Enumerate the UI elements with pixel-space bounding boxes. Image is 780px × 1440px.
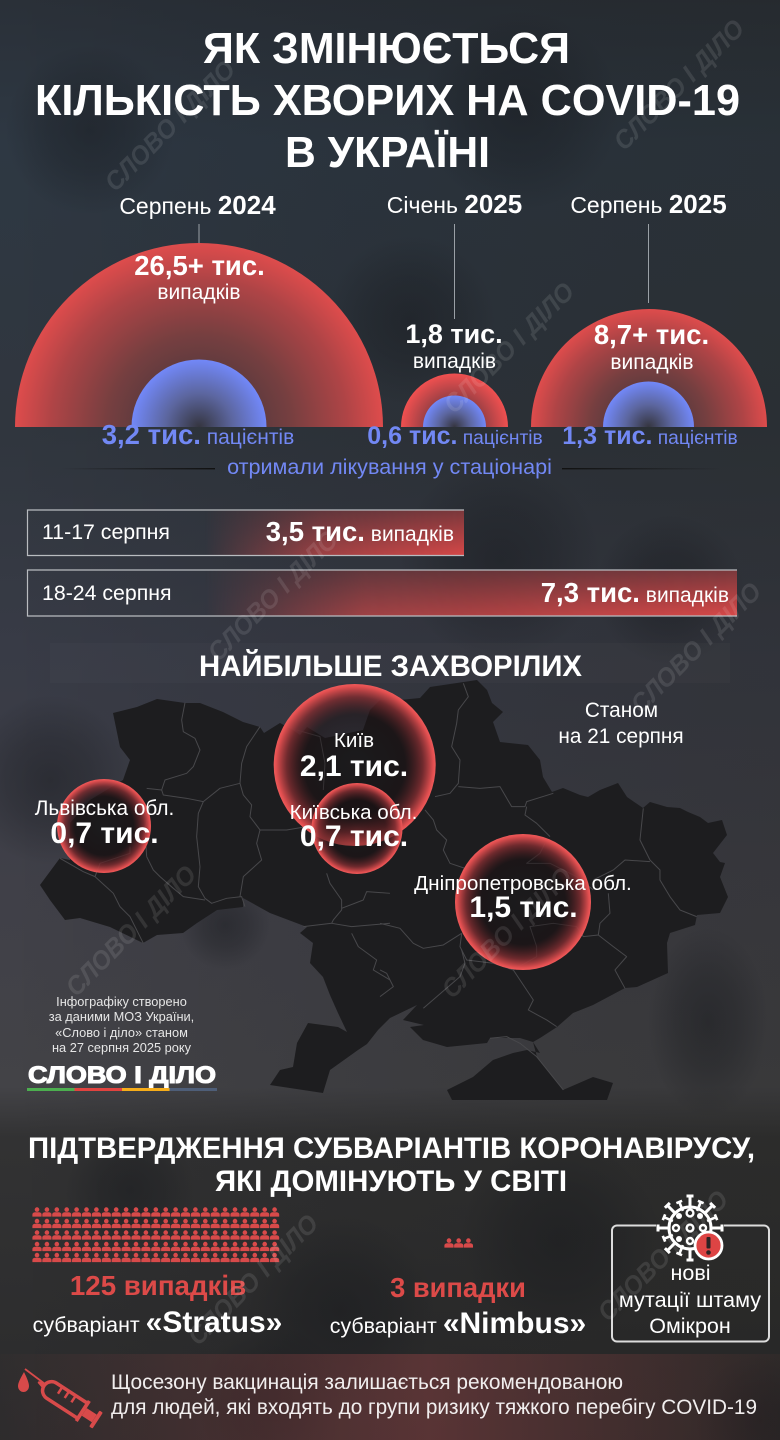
credit text: Інфографіку створено [56, 994, 187, 1009]
credit text [49, 994, 194, 1055]
heading: subvariants: ПІДТВЕРДЖЕННЯ СУБВАРІАНТІВ КОРОНАВІРУСУ, [28, 1132, 755, 1165]
semicircle: August 2025 [531, 309, 767, 427]
heading: subvariants: ЯКІ ДОМІНУЮТЬ У СВІТІ [215, 1165, 567, 1198]
bubble: Lviv region: 0,7 тис. [50, 817, 159, 850]
pictogram: 125 people [32, 1207, 279, 1262]
stat: Stratus [33, 1270, 282, 1339]
chart: semicircles of cases [15, 194, 767, 478]
bubble: Dnipropetrovsk region: Дніпропетровська обл. [414, 872, 632, 895]
note: as of 21 August: Станом [585, 699, 658, 722]
title: КІЛЬКІСТЬ ХВОРИХ НА COVID-19 [35, 76, 740, 125]
label: August 2024: Серпень 2024 [119, 190, 276, 220]
watermarks: СЛОВО І ДІЛО [59, 859, 202, 1002]
panel: new mutations [612, 1196, 769, 1342]
semicircle: August 2025: 8,7+ тис. [594, 319, 709, 350]
bar: 18-24 August: 18-24 серпня [42, 581, 172, 605]
semicircle: August 2024 [15, 243, 383, 427]
bar chart: weekly cases [28, 510, 737, 616]
bar: 18-24 August [28, 570, 737, 616]
panel: vaccination note: Щосезону вакцинація залишається рекомендованою [111, 1371, 623, 1394]
patients labels: 1,3 тис. пацієнтів [562, 422, 738, 450]
patients labels: 0,6 тис. пацієнтів [367, 422, 543, 450]
bubble: Dnipropetrovsk region [414, 834, 632, 970]
watermarks: СЛОВО І ДІЛО [591, 1184, 734, 1327]
patients labels: 3,2 тис. пацієнтів [102, 419, 294, 450]
bar: 11-17 August: 11-17 серпня [42, 520, 170, 544]
watermarks: СЛОВО І ДІЛО [624, 576, 767, 719]
bubble: Lviv region [35, 779, 174, 873]
watermarks: СЛОВО І ДІЛО [181, 1208, 324, 1351]
semicircle: August 2024: випадків [157, 281, 241, 304]
stat: Nimbus: 3 випадки [390, 1272, 526, 1303]
bar: 18-24 August: 7,3 тис. випадків [541, 577, 729, 608]
bar: 11-17 August [28, 510, 464, 556]
pictogram: 3 people [444, 1238, 473, 1248]
bubble: Dnipropetrovsk region: 1,5 тис. [469, 891, 578, 924]
semicircle: August 2024: 26,5+ тис. [134, 250, 265, 281]
heading: most cases: НАЙБІЛЬШЕ ЗАХВОРІЛИХ [199, 649, 582, 683]
stat: Nimbus: субваріант «Nimbus» [330, 1307, 586, 1340]
watermarks: СЛОВО І ДІЛО [607, 13, 750, 156]
label: January 2025: Січень 2025 [387, 189, 522, 219]
watermarks: СЛОВО І ДІЛО [98, 54, 241, 197]
Crimea [447, 1042, 613, 1100]
panel: vaccination note [0, 1354, 780, 1440]
bubble: Kyiv region: 0,7 тис. [300, 820, 408, 853]
bubble: Lviv region: Львівська обл. [35, 797, 174, 820]
title: ЯК ЗМІНЮЄТЬСЯ [203, 24, 570, 73]
stat: Stratus: субваріант «Stratus» [33, 1306, 282, 1339]
watermarks: СЛОВО І ДІЛО [437, 276, 580, 419]
map of Ukraine [40, 680, 728, 1100]
watermarks: СЛОВО І ДІЛО [201, 524, 344, 667]
bubble: Kyiv region [290, 783, 417, 874]
watermarks: СЛОВО І ДІЛО [435, 861, 578, 1004]
credit text: на 27 серпня 2025 року [52, 1040, 192, 1055]
title [35, 24, 740, 177]
stat: Nimbus [330, 1272, 586, 1340]
semicircle: January 2025: 1,8 тис. [405, 319, 503, 349]
credit text: «Слово і діло» станом [55, 1025, 188, 1040]
semicircle: January 2025 [401, 324, 508, 427]
bubble: Kyiv: Київ [334, 729, 374, 752]
bubble: Kyiv: 2,1 тис. [300, 750, 408, 783]
panel: new mutations: нові [670, 1261, 711, 1285]
semicircle: August 2025: випадків [610, 351, 694, 374]
panel: new mutations: Омікрон [649, 1314, 731, 1338]
bubble: Kyiv [274, 684, 436, 846]
stat: Stratus: 125 випадків [70, 1270, 246, 1301]
credit text: за даними МОЗ України, [49, 1009, 194, 1024]
title: В УКРАЇНІ [285, 128, 490, 177]
bubble: Kyiv region: Київська обл. [290, 801, 417, 824]
inpatient note: отримали лікування у стаціонарі [227, 454, 552, 479]
note: as of 21 August [558, 699, 684, 748]
logo: СЛОВО І ДІЛО [28, 1062, 216, 1089]
semicircle: January 2025: випадків [413, 350, 496, 373]
icon: syringe [18, 1369, 104, 1431]
heading: subvariants [28, 1132, 755, 1198]
note: as of 21 August: на 21 серпня [558, 725, 684, 748]
bar: 11-17 August: 3,5 тис. випадків [266, 516, 454, 547]
panel: new mutations: мутації штаму [619, 1287, 761, 1312]
panel: vaccination note: для людей, які входять до групи ризику тяжкого перебігу COVID-19 [111, 1396, 757, 1419]
label: August 2025: Серпень 2025 [570, 189, 727, 219]
patients labels [102, 419, 738, 450]
icon: virus with alert [658, 1196, 722, 1260]
